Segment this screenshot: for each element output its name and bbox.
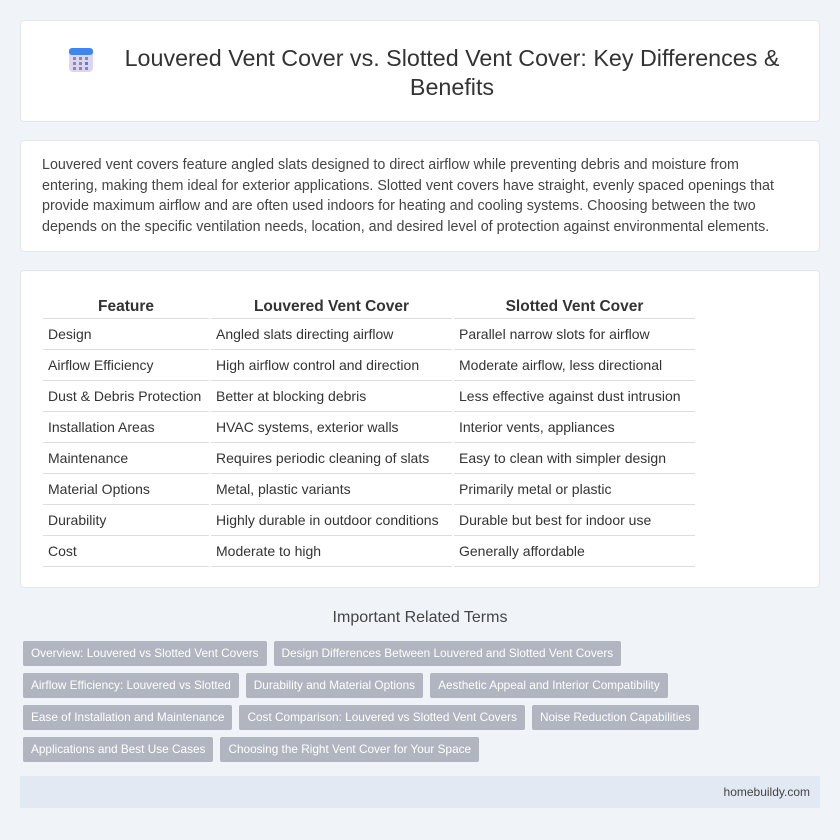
footer: homebuildy.com [724, 785, 810, 799]
tags: Choosing the Right Vent Cover for Your Space [228, 742, 471, 756]
comparison table: Parallel narrow slots for airflow [459, 326, 650, 342]
comparison table: Cost [48, 543, 77, 559]
tags: Cost Comparison: Louvered vs Slotted Vent Covers [247, 710, 517, 724]
comparison table: Metal, plastic variants [216, 481, 351, 497]
footer [20, 776, 820, 808]
tags: Noise Reduction Capabilities [540, 710, 691, 724]
comparison table: Better at blocking debris [216, 388, 366, 404]
tags: Applications and Best Use Cases [31, 742, 205, 756]
comparison table: Design [48, 326, 92, 342]
comparison table: Highly durable in outdoor conditions [216, 512, 439, 528]
tags: Design Differences Between Louvered and Slotted Vent Covers [282, 646, 613, 660]
comparison table [20, 270, 820, 588]
title card [20, 20, 820, 122]
comparison table: Requires periodic cleaning of slats [216, 450, 429, 466]
tags [23, 641, 699, 762]
comparison table: Dust & Debris Protection [48, 388, 201, 404]
title: Louvered Vent Cover vs. Slotted Vent Cover: Key Differences & Benefits [125, 45, 779, 100]
comparison table: Installation Areas [48, 419, 155, 435]
icon: calendar [69, 48, 93, 72]
intro text: Louvered vent covers feature angled slats designed to direct airflow while preventing debris and moisture from entering, making them ideal for exterior applications. Slotted vent covers have straight, evenly spaced openings that provide maximum airflow and are often used indoors for heating and cooling systems. Choosing between the two depends on the specific ventilation needs, location, and desired level of protection against environmental elements. [42, 157, 774, 234]
comparison table: Generally affordable [459, 543, 585, 559]
comparison table: Easy to clean with simpler design [459, 450, 666, 466]
tags: Aesthetic Appeal and Interior Compatibility [438, 678, 660, 692]
tags: Overview: Louvered vs Slotted Vent Covers [31, 646, 259, 660]
comparison table: High airflow control and direction [216, 357, 419, 373]
comparison table: Airflow Efficiency [48, 357, 154, 373]
comparison table: Slotted Vent Cover [506, 298, 643, 315]
comparison table: Louvered Vent Cover [254, 298, 409, 315]
comparison table: Maintenance [48, 450, 128, 466]
tags: Airflow Efficiency: Louvered vs Slotted [31, 678, 231, 692]
comparison table: Material Options [48, 481, 150, 497]
comparison table: Interior vents, appliances [459, 419, 615, 435]
comparison table: Durability [48, 512, 106, 528]
related terms heading: Important Related Terms [333, 609, 507, 626]
comparison table: Moderate to high [216, 543, 321, 559]
tags: Ease of Installation and Maintenance [31, 710, 224, 724]
comparison table: Angled slats directing airflow [216, 326, 393, 342]
comparison table: Moderate airflow, less directional [459, 357, 662, 373]
comparison table: Primarily metal or plastic [459, 481, 611, 497]
comparison table: HVAC systems, exterior walls [216, 419, 399, 435]
comparison table: Feature [98, 298, 154, 315]
intro text [20, 140, 820, 252]
comparison table: Durable but best for indoor use [459, 512, 651, 528]
tags: Durability and Material Options [254, 678, 415, 692]
comparison table: Less effective against dust intrusion [459, 388, 681, 404]
